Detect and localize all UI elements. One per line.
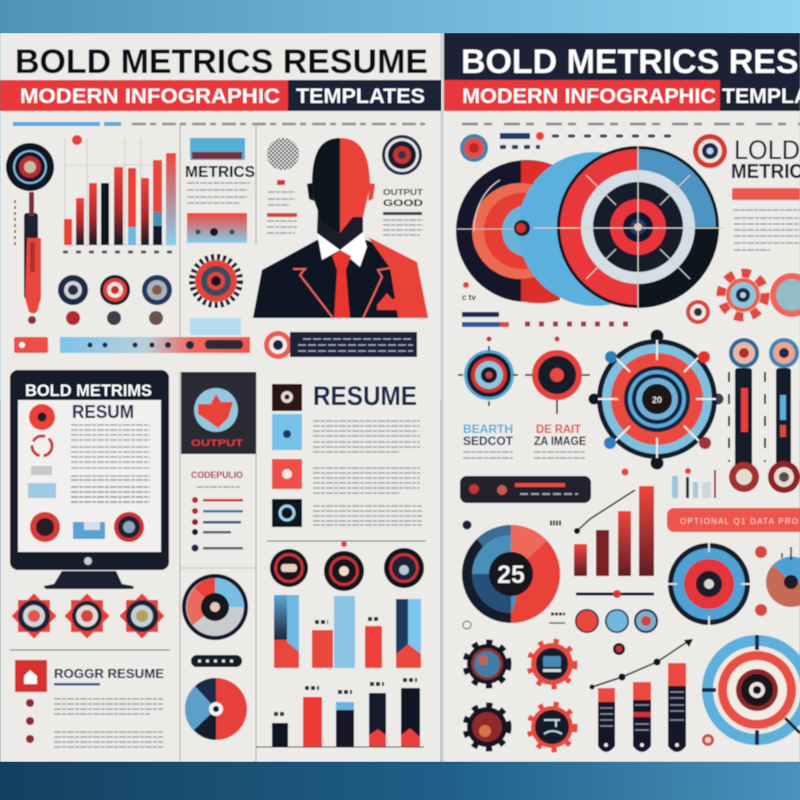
icon: thermometer right: [768, 338, 800, 493]
chart: blue disc: [518, 152, 672, 306]
top strip: [462, 123, 800, 125]
text block: profile right: GOOD: [383, 198, 424, 208]
pie chart: [185, 678, 247, 740]
icon: target gauge: [182, 574, 248, 640]
bar chart: lower: [256, 680, 424, 747]
panel: dark icon card: OUTPUT: [191, 438, 244, 448]
small notes: [463, 614, 565, 629]
callout: dark text bar: [290, 332, 417, 357]
small note: c tv: [462, 293, 476, 302]
icons: three dots: [575, 609, 658, 633]
bottom strip: [14, 337, 250, 353]
bar chart: upper: [274, 595, 421, 668]
chart: left ring: [456, 160, 598, 303]
icon: badge: [693, 134, 727, 168]
icons: badges: [270, 548, 424, 591]
text block: resume: [313, 421, 422, 525]
pill: [191, 655, 242, 667]
chart: target lower: [668, 543, 750, 625]
left header title: BOLD METRICS RESUME: [15, 43, 428, 81]
text block: right: [733, 210, 800, 250]
icon: gauge right: [525, 336, 590, 414]
icon: target small: [460, 134, 488, 162]
panel: right page: [441, 33, 800, 762]
icon: small badge: [702, 734, 714, 746]
icon: gauge left: [458, 336, 520, 414]
icons: gear row: [11, 593, 165, 639]
trend line: [590, 639, 693, 690]
illustration: monitor: [10, 370, 169, 589]
donut chart: [462, 525, 560, 623]
small note: [462, 282, 476, 302]
icon: target badge: [382, 135, 422, 175]
illustration: monitor: RESUM: [72, 402, 134, 422]
text block: blue stat: [463, 422, 514, 458]
small note top: [462, 520, 562, 530]
light blue box: [190, 318, 241, 335]
icon: partial gauge: [770, 273, 800, 317]
icon: partial dial: [755, 546, 800, 616]
chart: radial target: 20: [652, 395, 662, 405]
icon: badge: [264, 331, 292, 359]
text block: metrics: [187, 183, 250, 203]
legend bars: [462, 312, 630, 327]
heading: resume section: ROGGR RESUME: [54, 666, 164, 681]
icons: gear grid: [466, 642, 574, 749]
icons: circle row: [28, 275, 172, 325]
text block: profile right: [383, 188, 424, 235]
legend dots: [500, 132, 680, 147]
text block: red stat: [534, 422, 586, 458]
icon: small badge: [686, 300, 710, 324]
icon: magnifier: [6, 143, 54, 314]
illustration: monitor: BOLD METRIMS: [25, 381, 152, 400]
text block: resume section: [26, 683, 163, 747]
heading: bold metrics: [731, 135, 800, 183]
text block: blue stat: BEARTH: [463, 422, 513, 436]
right header band: [444, 80, 800, 111]
bar chart: growth: [574, 486, 654, 598]
text block: red stat: ZA IMAGE: [534, 434, 586, 448]
text block: red stat: DE RAIT: [536, 422, 582, 436]
red pill: OPTIONAL Q1 DATA PRO: [680, 517, 798, 526]
chart: main target: [534, 146, 724, 312]
heading: metrics: METRICS: [185, 164, 255, 181]
bar chart: [63, 135, 176, 252]
panel: red blue gradient: [187, 213, 247, 243]
illustration: silhouette in suit: [253, 138, 428, 318]
donut chart: 25: [497, 561, 525, 589]
icon: thermometer left: [729, 338, 759, 492]
red subtitle bar: [732, 188, 800, 200]
top strip: [13, 122, 425, 126]
icon: gear: [721, 273, 765, 317]
panel: dark icon card: [181, 372, 256, 454]
left header band: MODERN INFOGRAPHIC: [20, 85, 280, 108]
left header band: TEMPLATES: [296, 85, 425, 108]
text block: profile left: [267, 180, 297, 233]
panel: left page: [0, 33, 441, 762]
dark pill card: [460, 476, 591, 503]
red pill: [667, 508, 800, 532]
mini chart: [672, 468, 716, 498]
bar chart: capsules: [598, 663, 686, 752]
icon: dotted sphere: [267, 138, 299, 170]
right header band: MODERN INFOGRAPHIC: [462, 85, 716, 108]
card: list: [191, 470, 243, 552]
chart: target bottom: [702, 635, 800, 745]
icon column: [272, 384, 302, 527]
icon: gear: [192, 257, 240, 305]
icon: red square: [15, 660, 47, 692]
heading: resume: RESUME: [313, 381, 417, 411]
text block: blue stat: SEDCOT: [463, 434, 514, 448]
chart: radial target: [588, 330, 724, 470]
card: list: CODEPULIO: [191, 470, 243, 480]
left header band: [0, 80, 441, 111]
card: mini banner: [190, 138, 245, 160]
text block: profile right: OUTPUT: [383, 188, 423, 197]
